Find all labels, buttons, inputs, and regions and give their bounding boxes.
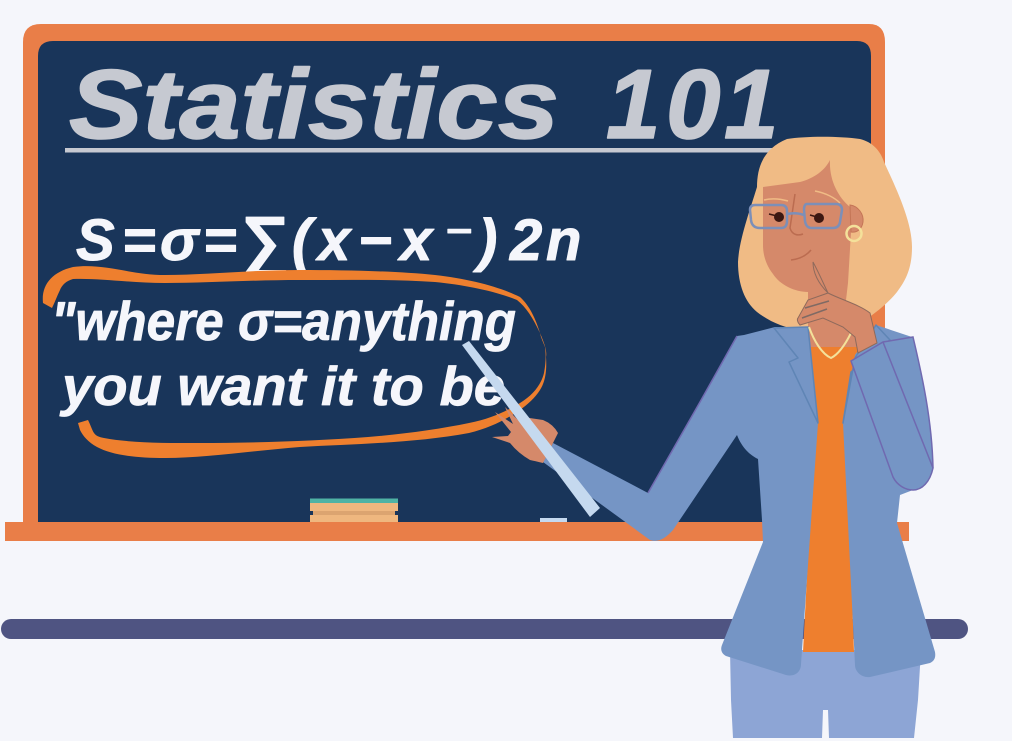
board frame <box>23 24 885 522</box>
eyebrows <box>764 191 840 203</box>
quote line 2: you want it to be <box>59 355 505 417</box>
formula: σ <box>160 208 201 273</box>
right lapel <box>843 325 890 423</box>
jacket left panel and arm <box>543 327 818 675</box>
chalk stick <box>540 518 567 522</box>
formula: = <box>203 208 237 273</box>
formula: S <box>76 208 115 273</box>
teacher figure <box>462 137 935 738</box>
sleeve crease <box>883 342 933 468</box>
pointing hand <box>492 407 558 463</box>
formula: x <box>315 208 353 273</box>
pants <box>730 650 921 738</box>
hair <box>738 137 912 330</box>
pointer stick <box>462 341 600 517</box>
formula: = <box>122 208 156 273</box>
left lapel <box>774 327 818 423</box>
forearm sleeve <box>851 337 933 490</box>
shirt <box>803 347 858 652</box>
necklace <box>809 327 851 358</box>
earring <box>846 226 862 241</box>
chalkboard <box>5 24 909 541</box>
formula: ⁻ <box>444 208 475 273</box>
formula: 2 <box>509 208 542 273</box>
title underline <box>65 148 785 152</box>
board surface <box>38 41 871 522</box>
quote line 1: "where σ=anything <box>51 290 516 352</box>
glasses <box>750 204 842 228</box>
smile <box>791 250 811 260</box>
horizontal rail behind the teacher <box>1 619 968 639</box>
formula: n <box>546 208 581 273</box>
formula: − <box>358 208 392 273</box>
nose <box>790 194 803 235</box>
title <box>69 49 779 159</box>
title: 101 <box>606 49 779 159</box>
ear <box>850 205 863 232</box>
formula: x <box>397 208 435 273</box>
formula: ( <box>292 208 317 273</box>
chalk ledge <box>5 522 909 541</box>
title: Statistics <box>69 49 559 159</box>
orange hand-drawn loop <box>43 266 546 458</box>
eyes <box>769 212 824 223</box>
formula: ) <box>472 208 497 273</box>
jacket right panel <box>843 325 935 677</box>
formula: ∑ <box>240 203 288 279</box>
stacked erasers <box>310 498 398 522</box>
neck and face <box>763 160 858 347</box>
arm outline <box>648 336 737 493</box>
thinking hand <box>797 262 877 353</box>
finger creases <box>802 301 829 318</box>
